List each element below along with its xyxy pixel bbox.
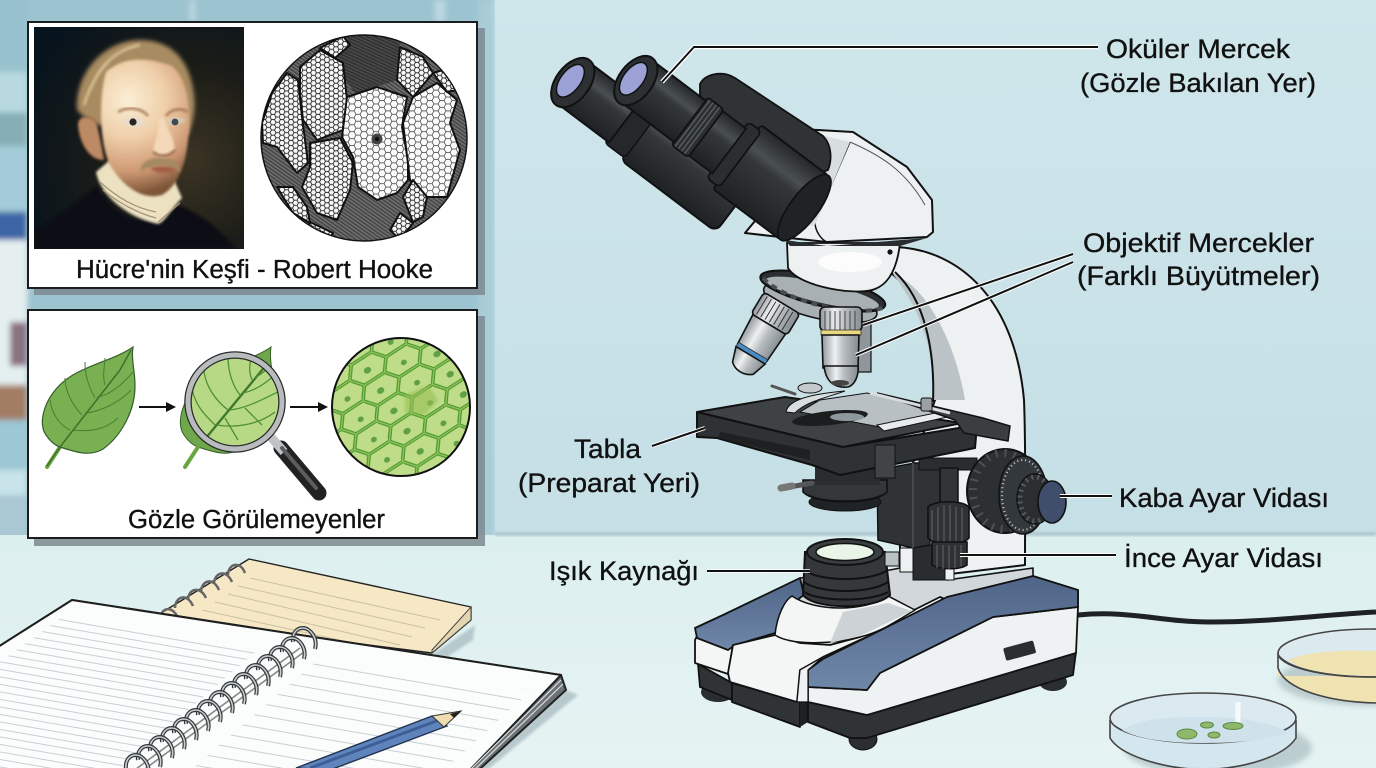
leader lines: objektif mercekler bbox=[856, 254, 1073, 355]
leader line: tabla bbox=[652, 428, 705, 446]
arrow bbox=[290, 402, 328, 412]
caption: Gözle Görülemeyenler bbox=[128, 506, 385, 534]
leader line: ışık kaynağı bbox=[707, 569, 810, 573]
notepad: beige spiral pad bbox=[153, 559, 475, 662]
background: wall and blurred lab window bbox=[0, 0, 1376, 540]
plant cells in microscope view bbox=[332, 338, 470, 476]
objective lens: left bbox=[723, 292, 800, 383]
petri dish: green colonies bbox=[1110, 693, 1312, 768]
condenser bbox=[781, 480, 887, 511]
eyepiece: rear bbox=[539, 45, 756, 232]
column block bbox=[877, 458, 977, 580]
panel: Gözle Görülemeyenler bbox=[28, 310, 485, 546]
label: Oküler Mercek: Oküler Mercek bbox=[1106, 34, 1291, 64]
portrait of Robert Hooke bbox=[34, 27, 244, 249]
label: İnce Ayar Vidası: İnce Ayar Vidası bbox=[1124, 542, 1323, 573]
pencil bbox=[296, 711, 461, 768]
fine focus knob bbox=[928, 468, 969, 569]
label: Tabla: (Preparat Yeri) bbox=[518, 468, 700, 498]
arrow bbox=[139, 402, 176, 412]
label: Objektif Mercekler: (Farklı Büyütmeler) bbox=[1077, 261, 1320, 291]
caption: Hücre'nin Keşfi - Robert Hooke bbox=[76, 256, 433, 284]
microscope bbox=[539, 38, 1078, 750]
notebook spiral binding bbox=[126, 628, 316, 768]
engraving of cork cells bbox=[261, 35, 467, 245]
power cord bbox=[1078, 612, 1376, 622]
label: Oküler Mercek bbox=[1080, 34, 1316, 98]
label: Tabla bbox=[518, 434, 700, 498]
notebook: large open spiral notebook bbox=[0, 600, 578, 768]
label: Kaba Ayar Vidası: Kaba Ayar Vidası bbox=[1119, 483, 1329, 513]
objective lens: front bbox=[820, 307, 862, 387]
panel: Hücre'nin Keşfi bbox=[28, 22, 485, 295]
label: Objektif Mercekler bbox=[1077, 228, 1320, 291]
eyepiece: front bbox=[598, 38, 840, 248]
label: Tabla: Tabla bbox=[574, 434, 642, 464]
icon: magnifying glass over leaf bbox=[180, 347, 319, 493]
stage bbox=[697, 383, 1010, 485]
microscope base bbox=[695, 568, 1078, 750]
leader line: kaba ayar bbox=[1060, 494, 1112, 498]
objective lens: rear bbox=[858, 322, 871, 372]
label: Objektif Mercekler: Objektif Mercekler bbox=[1083, 228, 1314, 258]
leader line: ince ayar bbox=[960, 553, 1116, 557]
leader line: oküler mercek bbox=[662, 47, 1098, 82]
coarse focus knob bbox=[967, 449, 1066, 534]
binocular head housing bbox=[745, 129, 933, 291]
icon: green leaf bbox=[42, 347, 135, 467]
light source bbox=[803, 539, 890, 606]
label: Işık Kaynağı: Işık Kaynağı bbox=[549, 556, 699, 586]
dark prism housing bbox=[700, 74, 831, 190]
microscope arm bbox=[890, 247, 1025, 580]
label: Oküler Mercek: (Gözle Bakılan Yer) bbox=[1080, 68, 1316, 98]
petri dish: yellow culture bbox=[1278, 629, 1376, 706]
nosepiece bbox=[754, 262, 889, 333]
table surface bbox=[0, 532, 1376, 768]
